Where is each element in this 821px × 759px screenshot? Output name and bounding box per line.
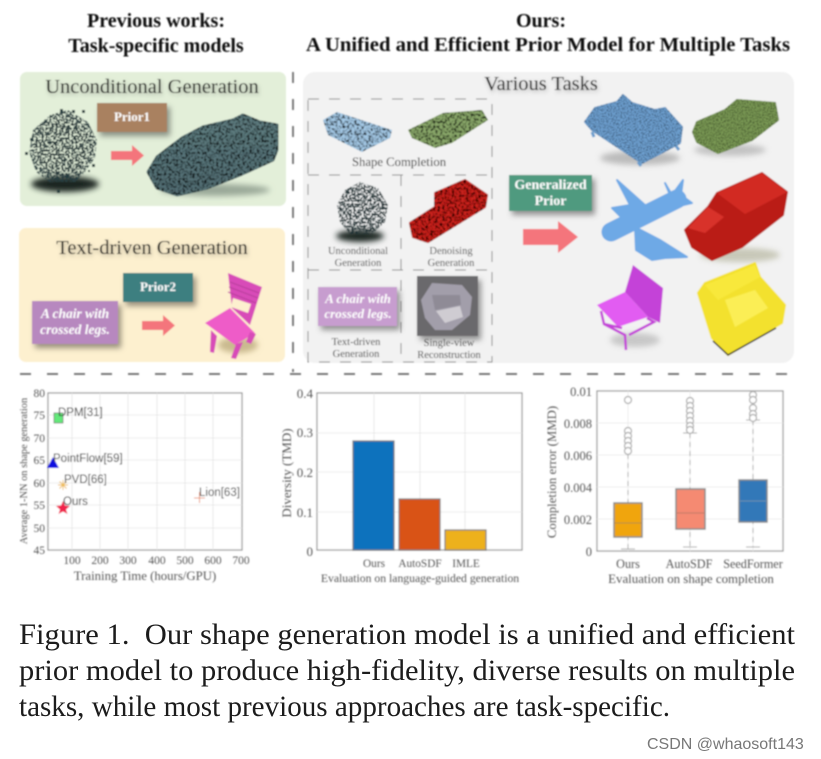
chart: diversity bars: AutoSDF <box>398 558 442 570</box>
chart: completion boxplots: 0.008 <box>564 417 592 431</box>
text box: chair prompt: A chair with <box>324 291 391 306</box>
watermark: CSDN @whaosoft143 <box>647 736 804 753</box>
box: Ours <box>614 503 642 537</box>
icon: noisy red truck <box>410 180 487 242</box>
chart: scatter training time: 300 <box>119 555 137 567</box>
title: previous works: Previous works: <box>87 10 225 32</box>
title: ours: Ours: <box>516 10 566 32</box>
chart: completion boxplots: 0.004 <box>564 481 593 495</box>
marker: Ours: Ours <box>63 496 88 508</box>
shape completion partial shapes <box>323 110 488 152</box>
chart: scatter training time: 45 <box>34 545 45 557</box>
chart: scatter training time: 80 <box>34 388 45 400</box>
labels: unconditional and denoising: Generation <box>335 258 382 269</box>
labels: unconditional and denoising: Unconditional <box>328 246 388 257</box>
chart: diversity bars: 0 <box>306 544 313 559</box>
heading: unconditional generation: Unconditional Generation <box>45 76 259 98</box>
title: ours: A Unified and Efficient Prior Model for Multiple Tasks <box>306 34 790 56</box>
chart: scatter training time: 500 <box>176 555 194 567</box>
text box: chair prompt: crossed legs. <box>40 322 110 337</box>
chart: scatter training time: 600 <box>204 555 222 567</box>
bar: AutoSDF <box>399 499 440 550</box>
icon: point cloud sphere <box>25 109 99 193</box>
text box: chair prompt <box>32 301 118 344</box>
chart: completion boxplots: SeedFormer <box>723 557 783 571</box>
icon: yellow armchair <box>698 263 785 355</box>
title: previous works <box>68 10 244 57</box>
chart: scatter training time: 60 <box>34 478 45 490</box>
icon: point cloud car <box>148 115 277 196</box>
caption: Figure 1. Our shape generation model is a unified and efficient <box>19 619 796 651</box>
marker: DPM <box>54 407 103 423</box>
marker: PointFlow: PointFlow[59] <box>53 453 123 465</box>
caption <box>19 619 796 723</box>
text box: chair prompt <box>318 287 397 326</box>
box: AutoSDF <box>676 489 705 529</box>
marker: PVD <box>58 474 107 490</box>
chart: diversity bars <box>279 386 522 585</box>
arrow <box>523 221 578 253</box>
chart: scatter training time: 700 <box>232 555 250 567</box>
label box: generalized prior <box>509 175 592 211</box>
chart: diversity bars: Evaluation on language-guided generation <box>321 572 519 585</box>
chart: scatter training time: 55 <box>34 500 45 512</box>
chart: scatter training time: 100 <box>63 555 81 567</box>
chart: diversity bars: 0.3 <box>297 425 313 440</box>
chart: scatter training time: 400 <box>148 555 166 567</box>
icon: purple chair <box>597 265 663 350</box>
arrow <box>111 145 144 166</box>
icon: pink chair <box>205 273 262 359</box>
labels: text-driven and single-view: Text-driven <box>332 337 381 348</box>
labels: text-driven and single-view: Reconstruction <box>417 350 482 361</box>
marker: Ours <box>56 496 88 514</box>
labels: text-driven and single-view <box>332 337 482 361</box>
marker: PVD: PVD[66] <box>64 474 107 486</box>
label box: generalized prior: Generalized <box>514 178 587 193</box>
chart: completion boxplots: Evaluation on shape completion <box>608 572 774 586</box>
bar: IMLE <box>445 530 486 550</box>
marker: DPM: DPM[31] <box>58 407 103 419</box>
marker: Lion <box>194 487 240 503</box>
chart: diversity bars: IMLE <box>452 558 480 570</box>
label box: prior1: Prior1 <box>114 109 150 124</box>
chart: diversity bars: Ours <box>363 558 385 570</box>
icon: green car <box>693 100 778 156</box>
chart: completion boxplots: 0 <box>586 545 592 559</box>
divider: vertical dashed <box>292 72 294 372</box>
outliers <box>624 392 756 454</box>
text box: chair prompt: crossed legs. <box>324 306 392 321</box>
label box: generalized prior: Prior <box>535 194 566 209</box>
label box: prior2: Prior2 <box>140 279 176 294</box>
title: ours <box>306 10 790 56</box>
chart: scatter training time: Average 1-NN on shape generation <box>19 397 30 544</box>
text box: chair prompt: A chair with <box>40 306 109 321</box>
chart: diversity bars: 0.4 <box>297 386 314 401</box>
labels: unconditional and denoising <box>328 246 475 269</box>
caption: prior model to produce high-fidelity, diverse results on multiple <box>19 655 795 687</box>
chart: diversity bars: Diversity (TMD) <box>279 428 294 518</box>
chart: completion boxplots: Ours <box>616 557 640 571</box>
divider: horizontal dashed <box>20 373 795 375</box>
bar: Ours <box>353 441 394 550</box>
caption: tasks, while most previous approaches are task-specific. <box>19 691 670 723</box>
chart: scatter training time: 200 <box>91 555 109 567</box>
marker: Lion: Lion[63] <box>199 487 240 499</box>
icon: red truck <box>685 173 787 262</box>
task inputs dashed box <box>308 99 492 362</box>
chart: scatter training time: Training Time (hours/GPU) <box>74 569 216 583</box>
chart: completion boxplots: Completion error (MMD) <box>545 406 559 538</box>
panel: unconditional generation <box>20 72 286 206</box>
chart: scatter training time: 70 <box>34 433 45 445</box>
chart: diversity bars: 0.1 <box>297 505 313 520</box>
chart: completion boxplots: 0.002 <box>564 513 592 527</box>
chart: scatter training time: 50 <box>34 523 45 535</box>
icon: blue sofa bed <box>585 95 682 166</box>
labels: text-driven and single-view: Generation <box>333 349 380 360</box>
title: previous works: Task-specific models <box>68 35 244 57</box>
heading: various tasks: Various Tasks <box>484 73 598 95</box>
chart: diversity bars: 0.2 <box>297 465 313 480</box>
chart: completion boxplots <box>545 385 783 586</box>
panel: various tasks <box>303 72 794 363</box>
chart: completion boxplots: 0.01 <box>570 385 592 399</box>
chart: scatter training time <box>19 388 250 583</box>
panel: text-driven generation <box>19 228 285 362</box>
chart: scatter training time: 65 <box>34 455 45 467</box>
label box: prior1 <box>97 103 167 132</box>
label box: prior2 <box>123 273 193 302</box>
labels: text-driven and single-view: Single-view <box>424 338 475 349</box>
icon: point cloud sphere small <box>336 182 388 242</box>
chart: completion boxplots: AutoSDF <box>666 557 713 571</box>
arrow <box>142 315 175 336</box>
box: SeedFormer <box>739 480 767 522</box>
chart: completion boxplots: 0.006 <box>564 449 592 463</box>
heading: text-driven generation: Text-driven Generation <box>56 237 248 259</box>
labels: unconditional and denoising: Generation <box>428 258 475 269</box>
icon: blue airplane <box>611 180 692 260</box>
labels: unconditional and denoising: Denoising <box>429 246 473 257</box>
image: armchair photo <box>417 276 478 336</box>
chart: scatter training time: 75 <box>34 410 45 422</box>
label: shape completion: Shape Completion <box>352 155 447 169</box>
